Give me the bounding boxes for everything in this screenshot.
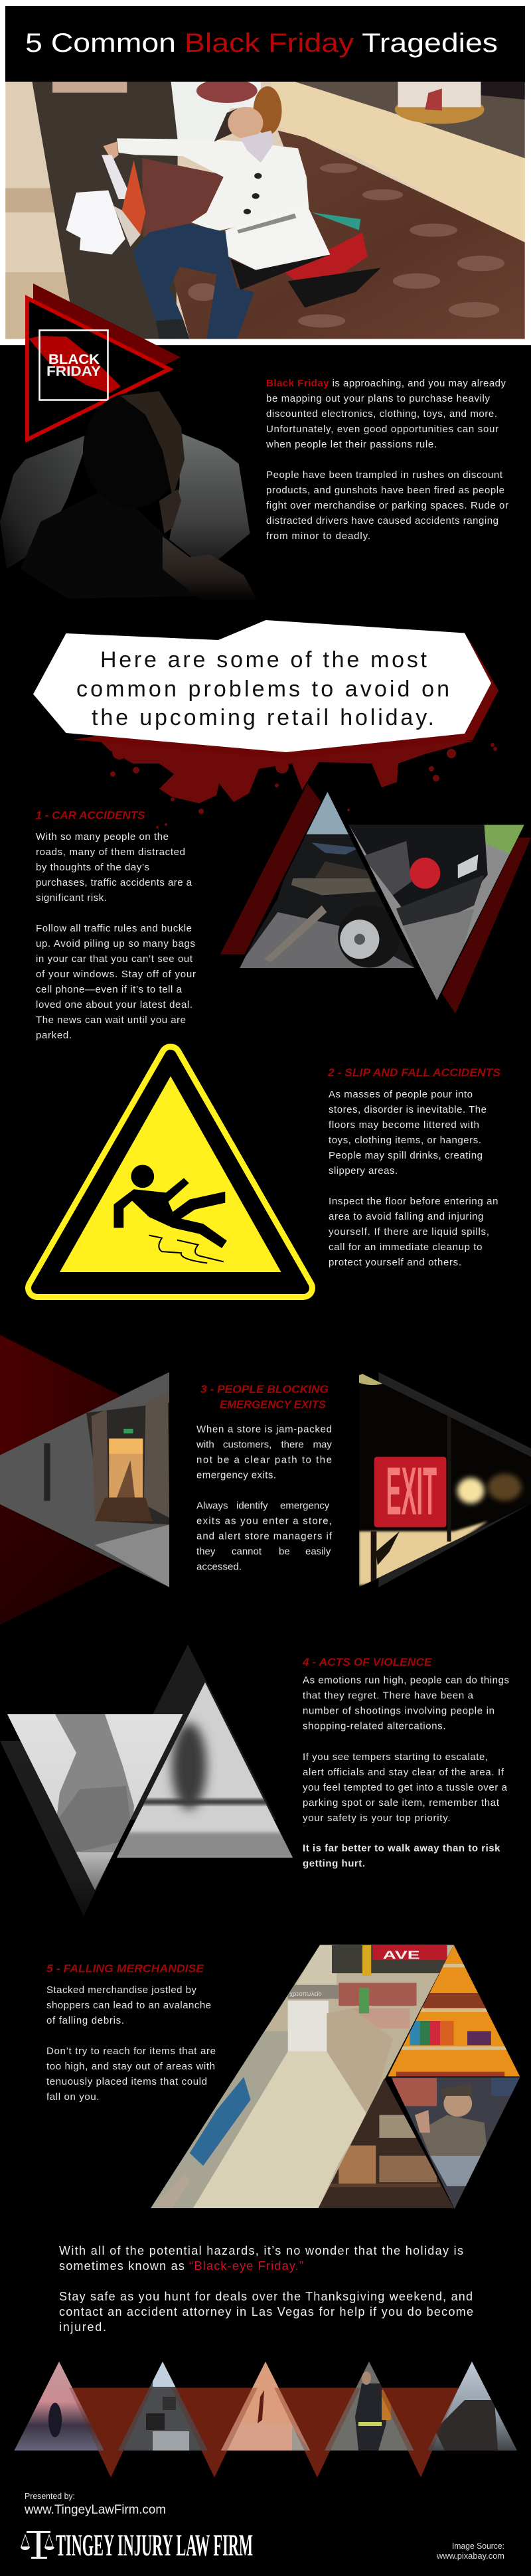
body: you feel tempted to get into a tussle over a [303,1782,508,1793]
body [303,1674,509,1870]
body: that they regret. There have been a [303,1690,474,1701]
body: up. Avoid piling up so many bags [36,938,195,949]
presented by: Presented by: [25,2491,75,2501]
section 1: car accidents [36,809,196,1041]
heading [200,1383,329,1411]
photo mosaic: store aisles [149,1945,522,2210]
closing text: sometimes known as “Black-eye Friday.” [59,2259,303,2273]
heading: 1 - CAR ACCIDENTS [36,809,145,822]
section 2: slip and fall [327,1066,501,1268]
body: they [196,1546,216,1558]
callout banner: common problems to avoid on [76,677,449,702]
body: With so many people on the [36,831,169,843]
body: toys, clothing items, or hangers. [329,1135,481,1146]
intro text: be mapping out your plans to purchase heavily [266,393,490,404]
icon: scales of justice [21,2531,54,2559]
body: accessed. [196,1562,242,1572]
section 5: falling merchandise [46,1963,216,2103]
body [329,1089,498,1268]
intro text: Unfortunately, even good opportunities can sour [266,424,498,435]
icon: slip hazard warning sign [37,1056,303,1288]
image source [436,2541,504,2561]
closing text [59,2244,473,2334]
intro text: distracted drivers have caused accidents ranging [266,515,498,526]
presented by [24,2491,166,2517]
section 3: blocked exits [196,1383,333,1572]
closing text: Stay safe as you hunt for deals over the Thanksgiving weekend, and [59,2290,473,2303]
photo mosaic: store aisles: AVE [383,1949,420,1962]
intro text: from minor to deadly. [266,530,370,542]
intro text: Black Friday is approaching, and you may already [266,378,506,389]
body: shoppers can lead to an avalanche [46,2000,211,2011]
bold takeaway [303,1843,500,1870]
body: shopping-related altercations. [303,1721,446,1731]
body: yourself. If there are liquid spills, [329,1226,489,1238]
body: identify [236,1500,268,1511]
heading: 3 - PEOPLE BLOCKING [200,1383,329,1396]
photo: traffic jam [116,2360,209,2453]
photo mosaic: store aisles: χρεοπωλείο [289,1990,322,1997]
body: People may spill drinks, creating [329,1150,483,1161]
photo: firefighter [322,2360,415,2453]
body: loved one about your latest deal. [36,999,192,1010]
body: exits as you enter a store, [196,1515,332,1527]
body: emergency [280,1500,330,1511]
body: and alert store managers if [196,1531,333,1542]
body: protect yourself and others. [329,1257,461,1268]
body: not be a clear path to the [196,1454,332,1466]
body: in your car that you can’t see out [36,953,193,965]
body: customers, [223,1439,271,1450]
heading: EMERGENCY EXITS [220,1398,327,1411]
intro text: when people let their passions rule. [266,439,437,450]
body: floors may become littered with [329,1119,479,1131]
body: significant risk. [36,892,107,904]
callout text: Here are some of the most [100,647,427,673]
body: As emotions run high, people can do things [303,1674,509,1686]
background zigzag [69,2387,459,2478]
body: fall on you. [46,2091,100,2103]
heading: 2 - SLIP AND FALL ACCIDENTS [327,1066,501,1079]
body: call for an immediate cleanup to [329,1242,482,1253]
body: alert officials and stay clear of the area. If [303,1767,504,1778]
brush stroke [29,336,121,393]
bold takeaway: It is far better to walk away than to risk [303,1843,500,1854]
body: purchases, traffic accidents are a [36,877,192,888]
section 4 graphic: fist and frightened figure [0,1645,299,1916]
body: of your windows. Stay off of your [36,969,196,980]
text: TINGEY INJURY LAW FIRM [56,2528,253,2563]
body [36,831,196,1041]
body: Follow all traffic rules and buckle [36,923,192,934]
callout banner [33,620,498,759]
intro text: discounted electronics, clothing, toys, and more. [266,408,497,420]
body: your safety is your top priority. [303,1812,450,1824]
title: 5 Common Black Friday Tragedies [25,29,498,58]
body: Stacked merchandise jostled by [46,1984,196,1996]
body: of falling debris. [46,2015,124,2026]
slipping figure [114,1165,227,1263]
intro text: products, and gunshots have been fired as people [266,485,504,496]
body: with [196,1439,214,1450]
law firm logo [21,2528,253,2563]
body [196,1423,333,1572]
hero photo: exhausted shopper on a sofa [5,78,525,339]
body: As masses of people pour into [329,1089,473,1100]
body: Always [196,1500,228,1511]
body: Inspect the floor before entering an [329,1196,498,1207]
photo: injured hand [219,2360,312,2453]
body: cannot [232,1546,262,1558]
body: by thoughts of the day’s [36,862,149,873]
image source: Image Source: [452,2541,504,2551]
title bar [5,6,525,82]
callout banner: the upcoming retail holiday. [92,705,434,730]
body: tenuously placed items that could [46,2076,207,2087]
body: parking spot or sale item, remember that [303,1797,500,1809]
logo: Black Friday triangle badge: FRIDAY [46,364,101,379]
intro text: fight over merchandise or parking spaces. Rude or [266,500,508,511]
logo: Black Friday triangle badge [27,283,181,440]
body: number of shootings involving people in [303,1705,494,1717]
body: stores, disorder is inevitable. The [329,1104,487,1115]
closing text: injured. [59,2320,106,2334]
body: cell phone—even if it’s to tell a [36,984,183,995]
section 3 right graphic: exit sign [356,1372,531,1589]
body: The news can wait until you are [36,1014,186,1026]
heading: 4 - ACTS OF VIOLENCE [302,1656,432,1668]
photo: woman walking [13,2360,106,2453]
image source: www.pixabay.com [436,2551,504,2561]
photo: burned truck [425,2360,518,2453]
section 3 left graphic: exit in the forest [0,1335,169,1625]
body: easily [305,1546,331,1558]
body: roads, many of them distracted [36,846,185,858]
body: emergency exits. [196,1470,276,1481]
logo wordmark: BLACK [48,352,100,367]
body: may [313,1439,332,1450]
body: When a store is jam-packed [196,1423,332,1435]
body [46,1984,216,2103]
translucent overlay triangles [69,2387,459,2478]
closing text: contact an accident attorney in Las Vegas for help if you do become [59,2305,473,2318]
photo: wrecked car in triangles [220,783,531,1014]
photo: distressed man [0,391,258,602]
intro text: People have been trampled in rushes on discount [266,469,503,481]
body: there [281,1439,304,1450]
body: be [279,1546,290,1558]
blood splatter [100,740,497,829]
triangle photo band [13,2360,518,2478]
heading: 5 - FALLING MERCHANDISE [46,1963,204,1974]
closing text: With all of the potential hazards, it’s no wonder that the holiday is [59,2244,463,2257]
body: Don’t try to reach for items that are [46,2046,216,2057]
bold takeaway: getting hurt. [303,1858,365,1870]
body: If you see tempers starting to escalate, [303,1751,488,1763]
section 4: acts of violence [302,1656,509,1870]
body: area to avoid falling and injuring [329,1211,483,1222]
body: too high, and stay out of areas with [46,2061,215,2072]
body: slippery areas. [329,1165,398,1176]
website: www.TingeyLawFirm.com [24,2503,166,2517]
intro text [266,378,508,542]
body: parked. [36,1030,72,1041]
